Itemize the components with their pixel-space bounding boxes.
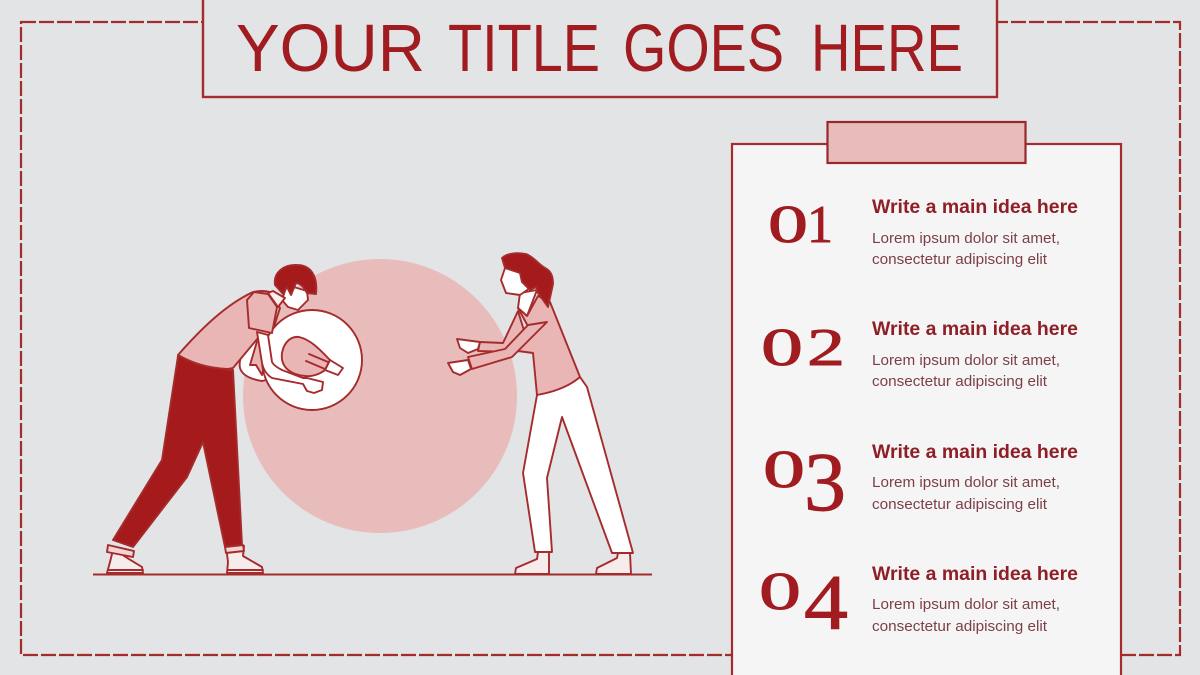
body 02: Lorem ipsum dolor sit amet, <box>872 352 1060 369</box>
ground line <box>93 574 652 576</box>
man torso <box>178 291 280 375</box>
woman hands <box>448 339 480 375</box>
woman neck <box>518 290 537 316</box>
man sleeve <box>247 292 277 333</box>
number 03: 3 <box>804 436 846 529</box>
woman front arm <box>468 322 547 369</box>
man shoes <box>107 546 263 573</box>
item 04 <box>759 559 1078 646</box>
illustration: two people and a light bulb <box>93 253 652 574</box>
panel: list card <box>732 122 1121 675</box>
number 04: 0 <box>759 563 801 621</box>
man <box>107 265 362 573</box>
woman shoes <box>515 552 631 574</box>
item 01 <box>768 196 1078 268</box>
title: GOES <box>623 11 784 86</box>
body 04: Lorem ipsum dolor sit amet, <box>872 596 1060 613</box>
tab <box>828 122 1026 163</box>
number 01: 0 <box>768 196 808 254</box>
man hair <box>275 265 316 295</box>
man cuffs <box>107 545 244 557</box>
heading 04: Write a main idea here <box>872 564 1078 585</box>
item 03 <box>763 436 1078 529</box>
number 03: 0 <box>763 441 805 499</box>
man face <box>282 285 308 310</box>
white circle with bulb <box>262 310 362 410</box>
title: TITLE <box>448 11 600 86</box>
number 02: 0 <box>761 319 803 377</box>
heading 01: Write a main idea here <box>872 197 1078 218</box>
man front arm and hand <box>257 332 323 393</box>
heading 03: Write a main idea here <box>872 442 1078 463</box>
woman torso <box>518 296 580 395</box>
title box <box>203 0 997 97</box>
number 01: 1 <box>807 196 833 254</box>
man shoe soles <box>108 569 263 571</box>
number 04: 4 <box>804 559 848 646</box>
body 01: Lorem ipsum dolor sit amet, <box>872 230 1060 247</box>
pink background circle <box>243 259 517 533</box>
woman <box>448 253 633 574</box>
title: YOUR <box>236 11 425 86</box>
heading 02: Write a main idea here <box>872 319 1078 340</box>
man back arm <box>240 335 276 381</box>
body 02: consectetur adipiscing elit <box>872 373 1048 390</box>
number 02: 2 <box>807 319 845 377</box>
woman face <box>501 268 530 295</box>
body 01: consectetur adipiscing elit <box>872 251 1048 268</box>
body 04: consectetur adipiscing elit <box>872 618 1048 635</box>
body 03: consectetur adipiscing elit <box>872 496 1048 513</box>
bulb icon <box>282 337 343 376</box>
man collar <box>268 291 285 307</box>
woman hair <box>502 253 553 307</box>
woman trousers <box>523 377 633 553</box>
body 03: Lorem ipsum dolor sit amet, <box>872 474 1060 491</box>
woman back arm <box>478 311 530 352</box>
man trousers <box>113 356 242 547</box>
item 02 <box>761 319 1078 390</box>
title: HERE <box>811 11 963 86</box>
